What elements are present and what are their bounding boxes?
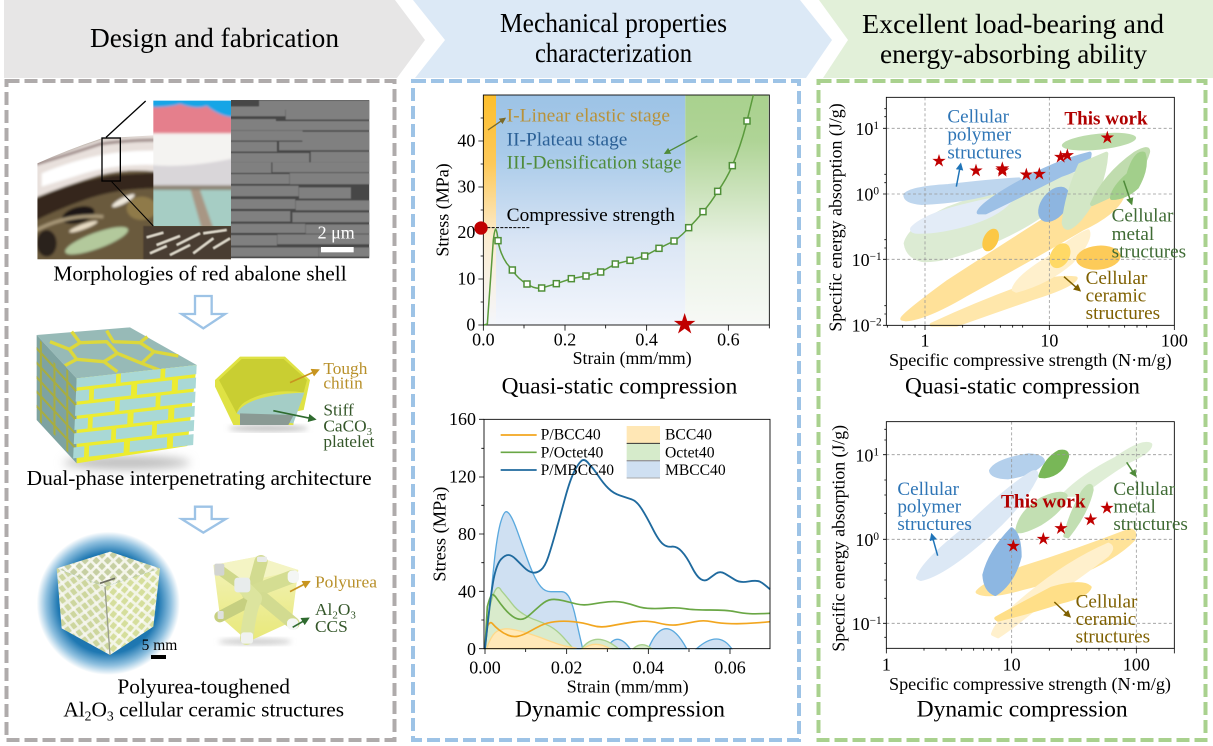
- chart: quasi-static Ashby plot: [826, 97, 1188, 399]
- legend: Octet40: [665, 444, 715, 461]
- icon: polyurea filled unit cell: [213, 557, 299, 645]
- label: cellular ceramic structures: ceramic: [1076, 609, 1136, 630]
- caption: polyurea-toughened structures: cellular ceramic structures: [114, 698, 344, 722]
- y tick labels: 20: [457, 222, 475, 242]
- label: stiff CaCO3 platelet: Stiff: [323, 401, 354, 420]
- arrow: polymer: [956, 164, 961, 187]
- arrow: ceramic: [1054, 602, 1070, 617]
- axes, ticks and dashed grid: [883, 97, 1174, 330]
- label: stiff CaCO3 platelet: platelet: [323, 432, 375, 451]
- caption: polyurea-toughened structures: 3: [107, 708, 114, 723]
- header: design and fabrication: [4, 0, 425, 78]
- y tick labels: 80: [458, 524, 476, 544]
- header: mechanical properties characterization: [413, 0, 832, 78]
- legend: P/MBCC40: [541, 462, 614, 479]
- label: cellular ceramic structures: structures: [1076, 626, 1150, 647]
- axis title: strain: Strain (mm/mm): [567, 677, 689, 698]
- x tick labels: 10: [1040, 331, 1058, 351]
- caption: quasi-static compression: Quasi-static compression: [502, 373, 738, 399]
- label: cellular polymer structures: Cellular: [897, 479, 960, 500]
- caption: morphologies: Morphologies of red abalone shell: [53, 261, 347, 285]
- header: excellent load-bearing and energy-absorbing ability: energy-absorbing ability: [880, 39, 1147, 69]
- x tick labels: 0.04: [633, 657, 664, 677]
- arrow: to stage III: [665, 136, 697, 153]
- filled specimen curves: [485, 512, 732, 649]
- x tick labels: [469, 657, 746, 677]
- legend: MBCC40: [665, 462, 726, 479]
- property regions: [918, 444, 1150, 636]
- figure: architecture block: [27, 296, 377, 723]
- y tick labels: [852, 446, 882, 634]
- axis title: stress: Stress (MPa): [432, 163, 453, 257]
- legend: P/Octet40: [541, 444, 603, 461]
- y tick labels: [457, 131, 475, 335]
- y tick labels: 10: [855, 530, 873, 550]
- label: Al2O3 CCS: 2: [332, 609, 338, 621]
- data stars: [1007, 501, 1114, 552]
- label: Al2O3 CCS: O: [338, 600, 350, 619]
- y tick labels: 0: [466, 315, 475, 335]
- y tick labels: 10: [855, 185, 873, 205]
- y tick labels: 40: [457, 131, 475, 151]
- scale bar 2 um: [318, 223, 355, 252]
- caption: polyurea-toughened structures: 2: [85, 708, 92, 723]
- legend: [501, 426, 726, 479]
- caption: polyurea-toughened structures: O: [92, 698, 107, 722]
- stage labels: I-Linear elastic stage: [507, 106, 670, 127]
- label: cellular polymer structures: structures: [897, 514, 972, 535]
- property regions: [902, 130, 1148, 325]
- header: excellent load-bearing and energy-absorbing ability: [819, 0, 1213, 78]
- axis title: strain: Strain (mm/mm): [573, 348, 692, 369]
- arrow: ceramic: [1064, 277, 1080, 291]
- label: cellular metal structures: metal: [1112, 224, 1154, 245]
- chart: quasi-static stress-strain curve: [432, 95, 769, 399]
- label: cellular ceramic structures: [1086, 268, 1160, 324]
- axis title: energy absorption: Specific energy absorption (J/g): [828, 425, 849, 652]
- y tick labels: 10: [855, 119, 873, 139]
- icon: hexagonal platelet: [215, 357, 310, 432]
- axes and ticks: [479, 419, 770, 654]
- y tick labels: [449, 409, 476, 659]
- label: cellular polymer structures: polymer: [897, 497, 962, 518]
- axes, ticks and dashed grid: [883, 422, 1174, 653]
- x tick labels: [882, 655, 1150, 675]
- arrow: second process step: [182, 507, 226, 533]
- arrow: metal: [1127, 462, 1136, 476]
- y tick labels: 0: [873, 186, 879, 198]
- axes and ticks: [478, 95, 769, 331]
- stage labels: [507, 106, 682, 173]
- caption: polyurea-toughened structures: Polyurea-toughened: [117, 674, 290, 698]
- label: cellular polymer structures: [897, 479, 972, 535]
- label: cellular ceramic structures: ceramic: [1086, 286, 1146, 307]
- label: cellular polymer structures: structures: [947, 142, 1022, 163]
- label: polyurea: Polyurea: [315, 572, 377, 591]
- label: cellular metal structures: Cellular: [1113, 479, 1176, 500]
- stage shading bands: [483, 95, 769, 325]
- x tick labels: 0.06: [714, 657, 746, 677]
- label: Al2O3 CCS: CCS: [315, 617, 348, 636]
- arrow: metal: [1124, 181, 1132, 204]
- arrow: chitin: [290, 370, 318, 383]
- label: stiff CaCO3 platelet: CaCO: [323, 417, 367, 436]
- icon: brick and mortar cube: [37, 327, 197, 469]
- header: mechanical properties characterization: characterization: [535, 38, 692, 68]
- y tick labels: [852, 119, 882, 336]
- x tick labels: 100: [1123, 655, 1150, 675]
- label: this work: This work: [1064, 108, 1148, 129]
- label: cellular ceramic structures: Cellular: [1076, 591, 1138, 612]
- label: cellular metal structures: structures: [1112, 242, 1186, 263]
- y tick labels: 0: [873, 531, 879, 543]
- label: cellular metal structures: metal: [1113, 497, 1156, 518]
- axis title: compressive strength: Specific compressive strength (N·m/g): [889, 350, 1172, 371]
- marker: red star: [674, 313, 695, 333]
- label: tough chitin: [323, 359, 368, 393]
- label: this work: This work: [1001, 491, 1086, 512]
- y tick labels: 120: [449, 467, 476, 487]
- x tick labels: 0.0: [472, 330, 495, 350]
- curve: P/BCC40: [485, 621, 770, 649]
- curve: P/Octet40: [485, 595, 770, 649]
- panel: load-bearing ability: [818, 81, 1206, 740]
- panel: design and fabrication: [6, 81, 394, 740]
- label: cellular ceramic structures: [1076, 591, 1150, 647]
- photo: lattice cube on blue halo: [37, 532, 180, 675]
- y tick labels: 1: [873, 447, 879, 459]
- chart: dynamic Ashby plot: [828, 422, 1188, 723]
- y tick labels: 10: [852, 316, 870, 336]
- axis title: stress: Stress (MPa): [429, 487, 450, 582]
- scale bar 2 um: 2 μm: [318, 223, 355, 243]
- arrow: platelet: [273, 411, 315, 419]
- callout: compressive strength: [474, 205, 675, 235]
- data stars: [932, 131, 1114, 180]
- label: cellular metal structures: [1112, 206, 1186, 263]
- caption: dynamic compression: Dynamic compression: [515, 697, 725, 723]
- panel: mechanical properties: [413, 81, 799, 740]
- label: tough chitin: chitin: [323, 374, 363, 393]
- label: cellular polymer structures: Cellular: [947, 107, 1010, 128]
- arrow: first process step: [182, 296, 225, 328]
- caption: polyurea-toughened structures: [63, 674, 344, 723]
- x tick labels: [472, 330, 740, 350]
- stage labels: II-Plateau stage: [507, 130, 627, 151]
- photo: abalone shell: [33, 133, 233, 263]
- y tick labels: 10: [852, 250, 870, 270]
- stage labels: III-Densification stage: [507, 152, 682, 173]
- photo: SEM of nacre layers: [231, 100, 369, 258]
- x tick labels: 10: [1003, 655, 1021, 675]
- label: cellular metal structures: Cellular: [1112, 206, 1174, 227]
- y tick labels: −1: [870, 251, 882, 263]
- x tick labels: 0.4: [635, 330, 658, 350]
- axis title: compressive strength: Specific compressive strength (N·m/g): [889, 674, 1171, 695]
- x tick labels: 100: [1161, 331, 1188, 351]
- x tick labels: 0.2: [554, 330, 576, 350]
- label: cellular ceramic structures: Cellular: [1086, 268, 1148, 289]
- y tick labels: 1: [873, 120, 879, 132]
- caption: polyurea-toughened structures: Al: [63, 698, 85, 722]
- caption: dual-phase architecture: Dual-phase interpenetrating architecture: [27, 466, 372, 490]
- arrow: to stage I: [488, 118, 505, 130]
- caption: quasi-static compression: Quasi-static compression: [905, 373, 1140, 399]
- y tick labels: −2: [870, 317, 882, 329]
- curve: P/MBCC40: [485, 460, 770, 649]
- y tick labels: 30: [457, 177, 475, 197]
- x tick labels: 1: [920, 331, 929, 351]
- x tick labels: 0.00: [469, 657, 501, 677]
- arrow: Al2O3 CCS: [293, 618, 308, 627]
- curve with markers: [484, 95, 753, 325]
- callout: compressive strength: Compressive strength: [507, 205, 675, 226]
- y tick labels: −1: [870, 615, 882, 627]
- legend: BCC40: [665, 427, 712, 444]
- y tick labels: 10: [457, 269, 475, 289]
- inset: magnified shell section: [150, 98, 233, 228]
- scale bar 5 mm: 5 mm: [142, 637, 177, 654]
- label: cellular metal structures: structures: [1113, 514, 1188, 535]
- x tick labels: 0.02: [551, 657, 582, 677]
- y tick labels: 160: [449, 409, 476, 429]
- x tick labels: [920, 331, 1188, 351]
- label: tough chitin: Tough: [323, 359, 368, 378]
- zoom marker lines and box: [102, 101, 153, 226]
- legend: P/BCC40: [541, 427, 601, 444]
- arrow: polymer: [932, 534, 938, 556]
- label: cellular ceramic structures: structures: [1086, 303, 1160, 324]
- figure: abalone shell morphologies: [33, 98, 369, 285]
- label: Al2O3 CCS: Al: [315, 600, 332, 619]
- header: excellent load-bearing and energy-absorbing ability: Excellent load-bearing and: [862, 9, 1164, 39]
- x tick labels: 0.6: [717, 330, 740, 350]
- label: cellular metal structures: [1113, 479, 1188, 535]
- y tick labels: 40: [458, 581, 476, 601]
- label: stiff CaCO3 platelet: [323, 401, 375, 451]
- y tick labels: 10: [855, 446, 873, 466]
- chart: dynamic stress-strain curves: [429, 409, 770, 723]
- label: stiff CaCO3 platelet: 3: [367, 426, 373, 438]
- x tick labels: 1: [882, 655, 891, 675]
- caption: dynamic compression: Dynamic compression: [917, 697, 1128, 723]
- label: Al2O3 CCS: [315, 600, 356, 636]
- arrow: polyurea: [290, 582, 309, 592]
- label: cellular polymer structures: polymer: [947, 125, 1012, 146]
- y tick labels: 0: [467, 639, 476, 659]
- y tick labels: 10: [852, 614, 870, 634]
- header: mechanical properties characterization: Mechanical properties: [500, 8, 727, 38]
- axis title: energy absorption: Specific energy absorption (J/g): [826, 103, 847, 332]
- label: cellular polymer structures: [947, 107, 1022, 163]
- label: Al2O3 CCS: 3: [350, 609, 356, 621]
- header: design and fabrication: Design and fabrication: [90, 23, 339, 53]
